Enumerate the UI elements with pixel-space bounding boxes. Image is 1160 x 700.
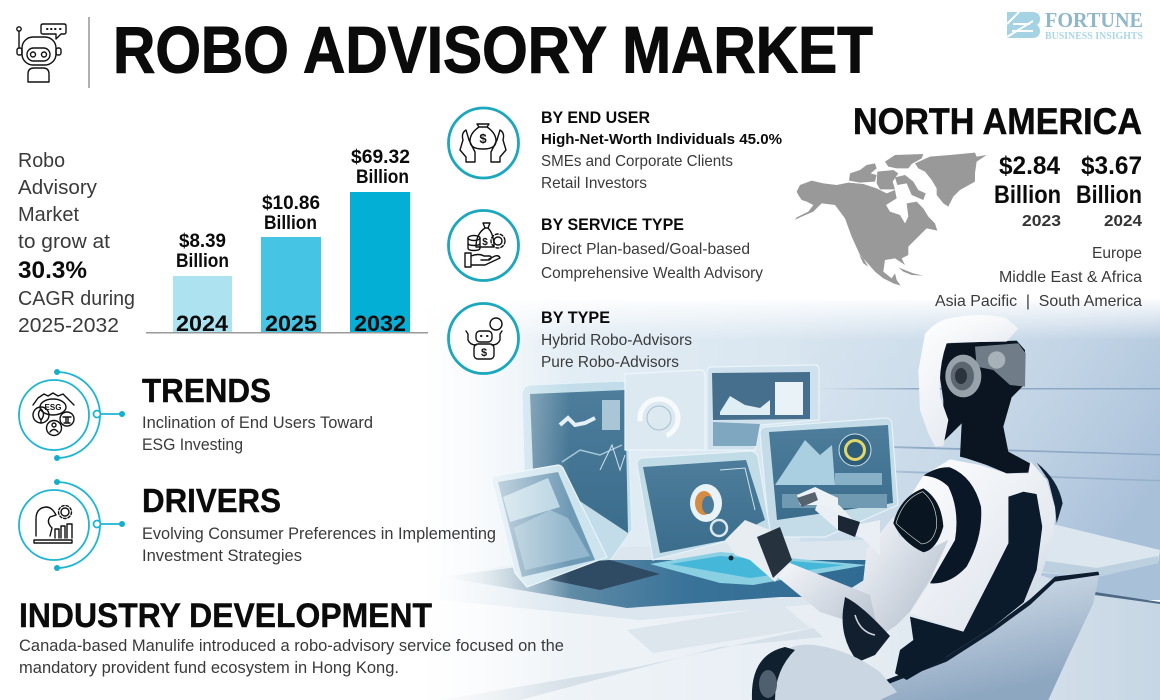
screen: laptop centre — [637, 451, 770, 560]
bar chart: market size: 2025 — [265, 311, 317, 336]
by end user text: Retail Investors — [541, 175, 647, 192]
logo: Fortune Business Insights: FORTUNE — [1045, 8, 1143, 32]
bar chart: market size — [146, 147, 428, 336]
by service type text: Comprehensive Wealth Advisory — [541, 265, 763, 282]
market growth text block — [18, 150, 135, 337]
other regions list: Europe — [1092, 245, 1142, 262]
icon: robot with speech bubble — [17, 24, 66, 82]
by type text — [541, 308, 692, 371]
bar chart: market size: $8.39 — [179, 231, 226, 252]
by service type text: Direct Plan-based/Goal-based — [541, 241, 750, 258]
logo: Fortune Business Insights: BUSINESS INSIGHTS — [1045, 31, 1143, 42]
shoulder disc — [893, 488, 943, 552]
head mechanism — [975, 343, 1026, 387]
map: North America — [795, 153, 987, 286]
other regions list — [935, 245, 1142, 310]
industry development: mandatory provident fund ecosystem in Hong Kong. — [19, 658, 399, 677]
by type text: BY TYPE — [541, 308, 610, 327]
lower torso — [895, 492, 1042, 680]
arm and hands — [725, 487, 897, 700]
icon: by service type — [448, 210, 518, 280]
near forearm — [775, 563, 880, 655]
chair — [860, 574, 1099, 700]
market growth text block: Market — [18, 204, 79, 226]
torso — [893, 459, 1056, 632]
desk top — [440, 525, 1160, 620]
bar chart: market size: $69.32 — [351, 147, 410, 168]
drivers text: Evolving Consumer Preferences in Implementing — [142, 524, 496, 543]
north america values: $3.67 — [1081, 152, 1142, 180]
floor and lower desk — [425, 575, 1160, 700]
screen: top chart — [707, 365, 819, 450]
far arm — [815, 497, 880, 555]
bar chart: market size: Billion — [264, 213, 317, 234]
bar chart: market size: $10.86 — [262, 193, 320, 214]
north america values — [994, 152, 1142, 230]
industry development — [19, 597, 564, 677]
trends text: Inclination of End Users Toward — [142, 413, 373, 432]
by service type text: BY SERVICE TYPE — [541, 215, 684, 234]
market growth text block: 2025-2032 — [18, 315, 119, 337]
screen: left small — [492, 465, 607, 587]
icon: by end user — [448, 108, 518, 178]
market growth text block: Advisory — [18, 177, 97, 199]
icon: by type: $ — [481, 347, 487, 359]
icon: drivers — [19, 479, 125, 571]
drivers text — [142, 482, 496, 565]
knee — [770, 645, 897, 700]
right back edge — [1037, 463, 1063, 523]
market growth text block: CAGR during — [18, 288, 135, 310]
desk front bands — [627, 605, 810, 653]
market growth text block: to grow at — [18, 231, 110, 253]
north america values: 2024 — [1104, 213, 1142, 230]
north america values: $2.84 — [999, 152, 1060, 180]
desk mat — [443, 560, 880, 608]
other regions list: Middle East & Africa — [999, 269, 1142, 286]
north america values: 2023 — [1022, 213, 1061, 230]
industry development: INDUSTRY DEVELOPMENT — [19, 597, 432, 635]
header divider — [88, 17, 90, 88]
bar chart: market size: 2024 — [176, 311, 229, 336]
icon: by end user: $ — [479, 131, 487, 146]
trends text: TRENDS — [142, 372, 271, 409]
icon: by type — [448, 304, 518, 374]
drivers text: DRIVERS — [142, 482, 281, 519]
icon: trends: ESG — [45, 403, 61, 412]
laptop base — [537, 560, 660, 590]
title: ROBO ADVISORY MARKET — [113, 12, 873, 86]
by type text: Hybrid Robo-Advisors — [541, 332, 692, 349]
bar chart: market size: Billion — [176, 251, 229, 272]
fade edges — [420, 296, 570, 700]
market growth text block: Robo — [18, 150, 65, 172]
trends text — [142, 372, 373, 454]
market growth text block: 30.3% — [18, 257, 87, 284]
head — [918, 315, 1018, 447]
icon: by service type: $ — [482, 237, 488, 248]
drivers text: Investment Strategies — [142, 546, 302, 565]
icon: trends — [19, 369, 125, 461]
by end user text: SMEs and Corporate Clients — [541, 153, 733, 170]
north america values: Billion — [994, 181, 1061, 209]
logo: Fortune Business Insights — [1007, 8, 1143, 42]
by end user text: BY END USER — [541, 108, 650, 127]
neck — [938, 341, 1030, 473]
screen: right dashboard — [760, 418, 898, 537]
by end user text: High-Net-Worth Individuals 45.0% — [541, 131, 782, 148]
screen: tall left — [522, 381, 632, 575]
by end user text — [541, 108, 782, 192]
tablet — [650, 552, 867, 585]
other regions list: Asia Pacific | South America — [935, 293, 1142, 310]
bar chart: market size: Billion — [356, 167, 409, 188]
wall — [425, 300, 1160, 600]
background scene: robot at desk with holographic screens — [420, 296, 1160, 700]
by type text: Pure Robo-Advisors — [541, 354, 679, 371]
industry development: Canada-based Manulife introduced a robo-advisory service focused on the — [19, 636, 564, 655]
by service type text — [541, 215, 763, 282]
near hand — [725, 520, 792, 582]
elbow — [843, 597, 890, 662]
screen: gauge — [625, 370, 705, 450]
bar chart: market size: 2032 — [354, 311, 406, 336]
shoulder band — [923, 467, 981, 583]
north america values: Billion — [1076, 181, 1142, 209]
north america heading: NORTH AMERICA — [853, 101, 1142, 142]
upper arm — [860, 517, 948, 643]
trends text: ESG Investing — [142, 435, 243, 454]
robot — [860, 315, 1099, 700]
